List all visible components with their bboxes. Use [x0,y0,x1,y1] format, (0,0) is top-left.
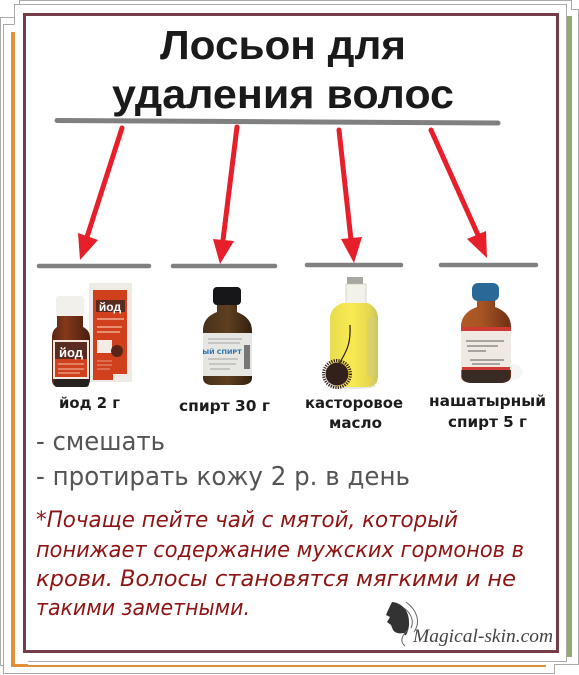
label: castor oil: масло [329,414,382,432]
product: iodine bottle and box [52,283,132,387]
tea note: крови. Волосы становятся мягкими и не [36,566,516,592]
iodine box: йод [99,300,121,314]
product: ammonia bottle [461,283,523,383]
title: Лосьон для [160,22,406,68]
label: ammonia: нашатырный [429,392,546,410]
ingredient divider bars [39,265,536,266]
tea note: *Почаще пейте чай с мятой, который [36,507,458,533]
product: alcohol bottle [202,287,252,385]
title: удаления волос [112,71,454,117]
tea note: понижает содержание мужских гормонов в [36,537,524,563]
ingredient labels [59,392,546,432]
arrow: to iodine [78,128,122,260]
arrow: to ammonia [431,130,487,258]
label: ammonia: спирт 5 г [448,413,527,431]
product: castor oil bottle with burr [324,277,378,389]
instructions text: - протирать кожу 2 р. в день [36,462,410,492]
product: alcohol bottle: ЫЙ СПИРТ [202,347,242,356]
label: iodine: йод 2 г [59,394,120,412]
icon: woman silhouette [386,602,409,635]
top divider bar [57,120,498,123]
arrow: to castor oil [339,130,362,263]
instructions text [36,427,410,492]
instructions text: - смешать [36,427,165,457]
tea note [36,507,524,621]
green stripe [567,16,572,657]
arrow: to alcohol [213,127,237,264]
logo: Magical-skin.com: Magical-skin.com [412,626,553,647]
label: ammonia [429,392,546,431]
label: alcohol: спирт 30 г [179,397,270,415]
logo: Magical-skin.com [386,602,553,647]
title [112,22,454,117]
label: castor oil [305,394,403,432]
spiky burr [324,360,350,388]
label: castor oil: касторовое [305,394,403,412]
iodine bottle: йод [59,345,84,360]
tea note: такими заметными. [36,595,250,621]
